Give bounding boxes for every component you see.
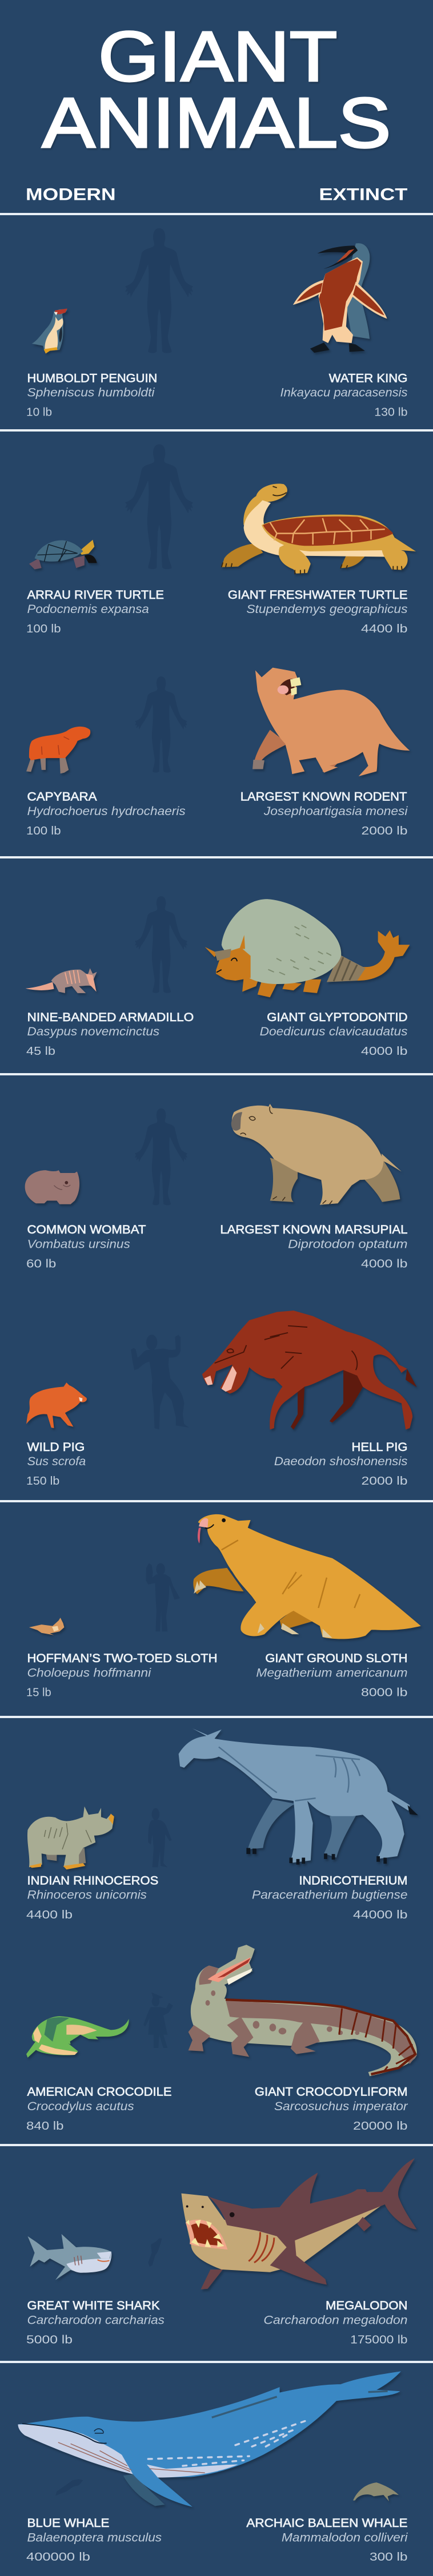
text: giant glyptodontid	[260, 1010, 408, 1058]
icon: nine-banded armadillo	[26, 968, 97, 993]
column heading: modern: MODERN	[26, 185, 116, 204]
text: american crocodile: 840 lb	[26, 2120, 63, 2132]
text: blue whale	[26, 2516, 162, 2563]
icon: archaic baleen whale	[353, 2482, 399, 2501]
text: indian rhinoceros: 4400 lb	[26, 1909, 73, 1921]
icon: great white shark	[27, 2234, 111, 2280]
icon: american crocodile	[26, 2016, 129, 2058]
text: hoffman's two-toed sloth: 15 lb	[26, 1687, 51, 1699]
text: nine-banded armadillo	[26, 1010, 194, 1058]
text: largest known rodent: Josephoartigasia monesi	[263, 804, 408, 818]
text: megalodon: Carcharodon megalodon	[263, 2313, 407, 2327]
icon: megalodon	[181, 2158, 416, 2289]
panel: rodents	[26, 668, 410, 837]
text: giant ground sloth	[256, 1651, 407, 1699]
text: common wombat	[26, 1223, 146, 1270]
text: giant ground sloth: GIANT GROUND SLOTH	[265, 1651, 407, 1665]
text: hoffman's two-toed sloth: HOFFMAN’S TWO-TOED SLOTH	[27, 1651, 217, 1665]
text: largest known marsupial: LARGEST KNOWN MARSUPIAL	[220, 1223, 408, 1236]
icon: giant crocodyliform	[189, 1945, 417, 2076]
icon: giant ground sloth	[193, 1514, 421, 1639]
text: indricotherium: 44000 lb	[353, 1909, 407, 1921]
icon: water king penguin	[293, 243, 387, 353]
human silhouette	[131, 1335, 189, 1429]
text: hoffman's two-toed sloth: Choloepus hoffmanni	[27, 1666, 152, 1679]
text: archaic baleen whale: 300 lb	[370, 2551, 407, 2563]
text: capybara: CAPYBARA	[27, 790, 97, 804]
text: nine-banded armadillo: Dasypus novemcinctus	[27, 1025, 160, 1038]
text: american crocodile: Crocodylus acutus	[27, 2099, 134, 2113]
diver silhouette	[148, 2239, 162, 2267]
icon: indricotherium	[179, 1728, 418, 1865]
text: hoffman's two-toed sloth	[26, 1651, 217, 1699]
text: largest known rodent	[240, 790, 408, 837]
text: capybara	[26, 790, 186, 837]
text: giant crocodyliform: Sarcosuchus imperator	[274, 2099, 408, 2113]
text: indricotherium: INDRICOTHERIUM	[299, 1873, 407, 1887]
text: indian rhinoceros	[26, 1873, 158, 1921]
text: wild pig: WILD PIG	[27, 1440, 85, 1454]
column heading: extinct: EXTINCT	[319, 185, 408, 204]
panel: penguins	[26, 228, 408, 419]
text: indian rhinoceros: INDIAN RHINOCEROS	[27, 1873, 158, 1887]
human silhouette	[135, 1108, 187, 1205]
text: largest known marsupial	[220, 1223, 408, 1270]
icon: hell pig	[202, 1311, 416, 1429]
panel: armadillos	[26, 896, 410, 1058]
icon: giant glyptodontid	[205, 899, 410, 997]
human silhouette	[143, 1993, 173, 2048]
icon: wild pig	[26, 1382, 87, 1428]
human silhouette	[146, 1563, 180, 1631]
icon: largest known marsupial	[231, 1104, 402, 1205]
text: arrau river turtle: 100 lb	[26, 623, 61, 635]
icon: capybara	[26, 727, 90, 773]
text: largest known marsupial: Diprotodon optatum	[288, 1237, 407, 1251]
text: giant freshwater turtle: 4400 lb	[361, 623, 407, 635]
icon: indian rhinoceros	[27, 1807, 114, 1869]
text: blue whale: BLUE WHALE	[27, 2516, 109, 2530]
icon: giant freshwater turtle	[222, 483, 416, 574]
text: indricotherium	[252, 1873, 408, 1921]
text: giant crocodyliform: 20000 lb	[353, 2120, 407, 2132]
text: largest known marsupial: 4000 lb	[361, 1257, 407, 1270]
text: capybara: Hydrochoerus hydrochaeris	[27, 804, 186, 818]
panel: crocodiles	[26, 1945, 417, 2132]
text: blue whale: Balaenoptera musculus	[27, 2530, 162, 2544]
text: common wombat: 60 lb	[26, 1257, 56, 1270]
human silhouette	[125, 444, 193, 569]
text: wild pig: 150 lb	[26, 1475, 59, 1487]
human silhouette	[135, 676, 187, 772]
text: largest known rodent: 2000 lb	[362, 825, 407, 837]
text: archaic baleen whale: ARCHAIC BALEEN WHALE	[246, 2516, 407, 2530]
panel: marsupials	[25, 1104, 408, 1270]
text: archaic baleen whale: Mammalodon colliveri	[282, 2530, 408, 2544]
icon: arrau river turtle	[29, 540, 97, 570]
text: wild pig	[26, 1440, 86, 1487]
text: giant freshwater turtle: Stupendemys geographicus	[246, 602, 408, 616]
text: nine-banded armadillo: 45 lb	[26, 1045, 55, 1058]
text: humboldt penguin	[26, 371, 157, 419]
icon: blue whale	[18, 2371, 401, 2507]
text: great white shark	[26, 2299, 165, 2346]
text: blue whale: 400000 lb	[26, 2551, 90, 2563]
title: ANIMALS	[42, 84, 391, 163]
panel: sloths	[26, 1514, 421, 1699]
text: common wombat: COMMON WOMBAT	[27, 1223, 146, 1236]
text: common wombat: Vombatus ursinus	[27, 1237, 130, 1251]
text: water king	[280, 371, 408, 419]
text: arrau river turtle: Podocnemis expansa	[27, 602, 149, 616]
text: hell pig: HELL PIG	[352, 1440, 407, 1454]
text: giant ground sloth: 8000 lb	[361, 1687, 407, 1699]
text: american crocodile	[26, 2085, 172, 2132]
text: megalodon: MEGALODON	[326, 2299, 407, 2312]
text: american crocodile: AMERICAN CROCODILE	[27, 2085, 172, 2098]
text: water king: WATER KING	[329, 371, 407, 385]
text: hell pig: Daeodon shoshonensis	[274, 1454, 408, 1468]
text: water king: Inkayacu paracasensis	[280, 386, 408, 400]
text: giant freshwater turtle	[228, 588, 408, 635]
text: humboldt penguin: Spheniscus humboldti	[27, 386, 155, 400]
text: hell pig: 2000 lb	[362, 1475, 407, 1487]
text: arrau river turtle	[26, 588, 164, 635]
text: megalodon	[263, 2299, 407, 2346]
text: wild pig: Sus scrofa	[27, 1454, 86, 1468]
icon: common wombat	[25, 1170, 79, 1204]
icon: largest known rodent	[252, 668, 410, 776]
panel: whales	[18, 2371, 408, 2563]
text: arrau river turtle: ARRAU RIVER TURTLE	[27, 588, 164, 602]
panel: turtles	[26, 444, 416, 635]
title: GIANT	[98, 18, 337, 96]
icon: humboldt penguin	[32, 308, 67, 353]
text: nine-banded armadillo: NINE-BANDED ARMADILLO	[27, 1010, 194, 1024]
panel: pigs	[26, 1311, 416, 1487]
text: indian rhinoceros: Rhinoceros unicornis	[27, 1888, 147, 1902]
text: indricotherium: Paraceratherium bugtiense	[252, 1888, 408, 1902]
human silhouette	[135, 896, 187, 993]
text: giant glyptodontid: Doedicurus clavicaudatus	[260, 1025, 408, 1038]
diver silhouette	[55, 2479, 83, 2496]
panel: sharks	[26, 2158, 416, 2346]
text: great white shark: 5000 lb	[26, 2333, 73, 2346]
panel: rhinos	[26, 1728, 418, 1921]
icon: two-toed sloth	[29, 1618, 64, 1635]
text: giant freshwater turtle: GIANT FRESHWATER TURTLE	[228, 588, 407, 602]
text: giant ground sloth: Megatherium americanum	[256, 1666, 407, 1679]
text: humboldt penguin: 10 lb	[26, 406, 52, 419]
text: giant glyptodontid: 4000 lb	[361, 1045, 407, 1058]
text: great white shark: Carcharodon carcharias	[27, 2313, 165, 2327]
text: archaic baleen whale	[246, 2516, 408, 2563]
text: giant crocodyliform	[255, 2085, 408, 2132]
text: great white shark: GREAT WHITE SHARK	[27, 2299, 160, 2312]
text: humboldt penguin: HUMBOLDT PENGUIN	[27, 371, 157, 385]
text: giant crocodyliform: GIANT CROCODYLIFORM	[255, 2085, 407, 2098]
text: capybara: 100 lb	[26, 825, 61, 837]
text: giant glyptodontid: GIANT GLYPTODONTID	[267, 1010, 407, 1024]
text: largest known rodent: LARGEST KNOWN RODENT	[240, 790, 407, 804]
title	[42, 18, 391, 163]
text: water king: 130 lb	[374, 406, 407, 419]
text: hell pig	[274, 1440, 408, 1487]
human silhouette	[148, 1808, 172, 1867]
human silhouette	[125, 228, 193, 353]
text: megalodon: 175000 lb	[350, 2333, 407, 2346]
